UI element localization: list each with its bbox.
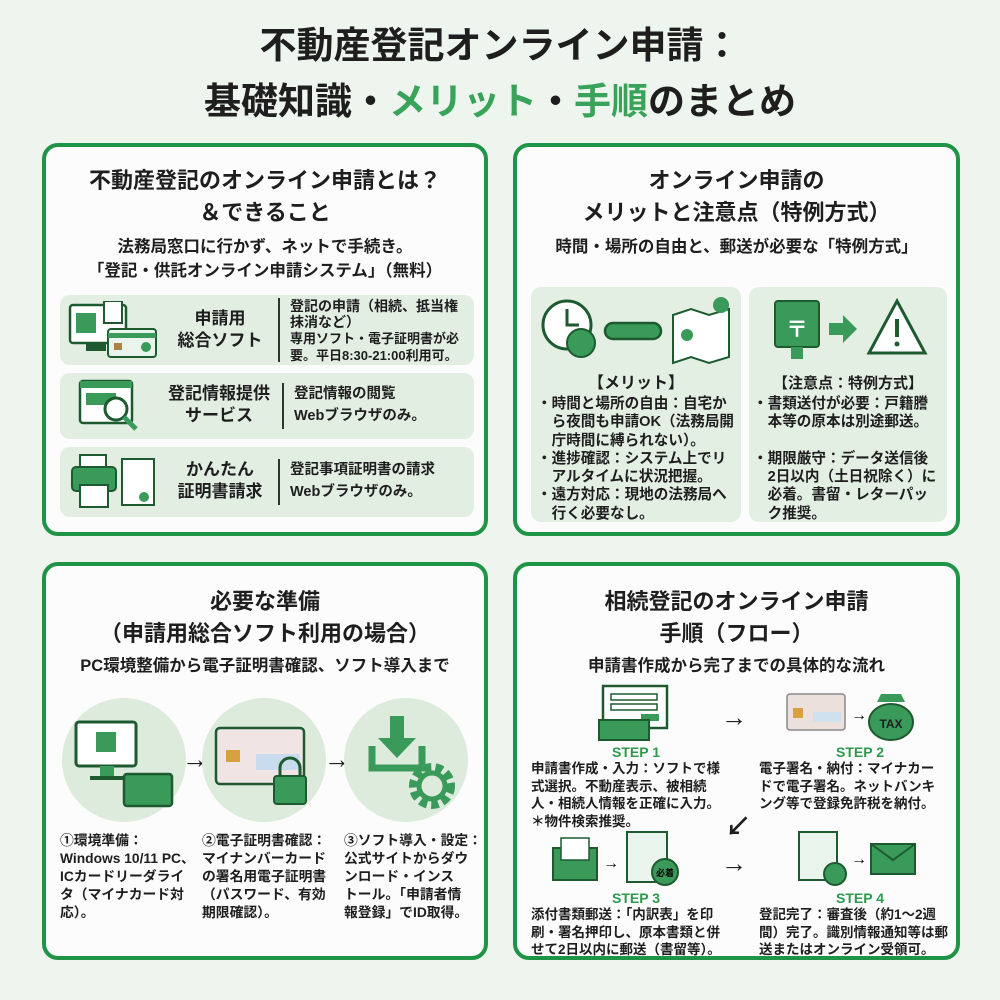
step 2 (759, 693, 935, 811)
box: cautions: 【注意点：特例方式】 (773, 375, 923, 392)
arrow: → (324, 744, 350, 774)
step 1: 人・相続人情報を正確に入力。 (531, 796, 720, 811)
panel: flow: ング等で登録免許税を納付。 (759, 796, 934, 811)
panel: merits (513, 143, 960, 536)
heading: preparation: （申請用総合ソフト利用の場合） (100, 621, 430, 646)
icon: card tax: → (851, 707, 867, 724)
heading: flow: 手順（フロー） (659, 621, 814, 646)
row: info service: 登記情報の閲覧 (294, 386, 396, 402)
heading: basics: ＆できること (199, 200, 331, 225)
title: 基礎知識・メリット・手順のまとめ (204, 81, 796, 122)
row: software: 抹消など） (290, 314, 360, 330)
step 1: environment: タ（マイナカード対 (60, 887, 184, 902)
row: software: 要。平日8:30-21:00利用可。 (290, 348, 458, 363)
box: merits: 【メリット】 (588, 375, 684, 392)
icon: envelope doc: 必着 (656, 867, 674, 878)
step 2: certificate: 期限確認）。 (202, 905, 278, 920)
heading: basics (89, 168, 441, 225)
heading: merits (582, 168, 890, 225)
step 2: certificate: ②電子証明書確認： (202, 833, 326, 848)
step 1: STEP 1 (612, 744, 660, 760)
heading: flow: 相続登記のオンライン申請 (604, 589, 868, 614)
box: cautions (749, 287, 947, 522)
row: software: 登記の申請（相続、抵当権 (290, 298, 458, 314)
box: cautions: ク推奨。 (768, 506, 826, 522)
icon: card lock (202, 698, 326, 822)
arrow: ↙ (725, 812, 751, 842)
step 2: certificate: （パスワード、有効 (202, 887, 326, 902)
step 1: environment: 応）。 (60, 905, 94, 920)
heading: preparation (100, 589, 430, 646)
step 1: environment: ICカードリーダライ (60, 869, 184, 884)
box: merits: ら夜間も申請OK（法務局開 (552, 414, 734, 430)
icon: pc and card (68, 301, 157, 358)
row: software: 申請用 (194, 309, 246, 328)
panel: flow: ＊物件検索推奨。 (531, 814, 639, 828)
step 3: 刷・署名押印し、原本書類と併 (531, 924, 720, 940)
row: info service: 登記情報提供 (168, 384, 270, 403)
subtitle: basics: 「登記・供託オンライン申請システム」（無料） (88, 262, 442, 280)
box: merits: ・進捗確認：システム上でリ (537, 451, 726, 467)
subtitle: basics: 法務局窓口に行かず、ネットで手続き。 (117, 238, 413, 256)
row: certificate: かんたん (186, 460, 254, 479)
step 3: STEP 3 (612, 890, 660, 906)
icon: envelope doc (552, 831, 679, 886)
step 3: software: 公式サイトからダウ (344, 851, 468, 866)
box: cautions: 本等の原本は別途郵送。 (768, 414, 928, 430)
step 1: environment: Windows 10/11 PC、 (60, 851, 195, 866)
step 1 (531, 684, 720, 828)
box: merits: アルタイムに状況把握。 (552, 469, 712, 485)
icon: doc check mail: → (851, 851, 867, 868)
panel: flow (513, 562, 960, 960)
heading: basics: 不動産登記のオンライン申請とは？ (89, 168, 441, 193)
icon: doc check mail (798, 831, 916, 886)
step 4 (759, 831, 948, 957)
box: merits: 行く必要なし。 (552, 506, 654, 522)
icon: post arrow warning (774, 298, 928, 359)
row: software (60, 295, 474, 365)
step 4: 登記完了：審査後（約1〜2週 (759, 907, 936, 922)
step 4: 間）完了。識別情報通知等は郵 (759, 924, 948, 940)
step 3: せて2日以内に郵送（書留等）。 (531, 942, 721, 957)
step 2: certificate (202, 698, 326, 920)
step 2: 電子署名・納付：マイナカー (759, 761, 934, 776)
panel: preparation (42, 562, 488, 960)
subtitle: basics (88, 238, 442, 280)
row: software: 専用ソフト・電子証明書が必 (290, 331, 459, 346)
box: merits: ・遠方対応：現地の法務局へ (537, 487, 727, 503)
step 2: ドで電子署名。ネットバンキ (759, 778, 935, 794)
step 3: software (344, 698, 482, 920)
step 4: STEP 4 (836, 890, 884, 906)
row: certificate (60, 447, 474, 517)
icon: clock bar map (542, 297, 730, 364)
step 1: environment (60, 698, 195, 920)
icon: pc and reader (62, 698, 186, 822)
step 3: software: ンロード・インス (344, 869, 454, 884)
row: certificate: Webブラウザのみ。 (290, 484, 422, 500)
step 2: STEP 2 (836, 744, 884, 760)
step 1: 申請書作成・入力：ソフトで様 (531, 761, 720, 776)
step 3: 添付書類郵送：「内訳表」を印 (531, 907, 713, 922)
box: cautions: 必着。書留・レターパッ (768, 487, 928, 503)
step 3 (531, 831, 721, 957)
heading: merits: メリットと注意点（特例方式） (582, 200, 890, 225)
row: info service (60, 373, 474, 439)
row: certificate: 登記事項証明書の請求 (290, 462, 435, 478)
step 1: environment: ①環境準備： (60, 833, 143, 848)
subtitle: merits: 時間・場所の自由と、郵送が必要な「特例方式」 (555, 238, 918, 256)
step 1: 式選択。不動産表示、被相続 (531, 778, 706, 794)
title: 不動産登記オンライン申請： (260, 25, 740, 66)
box: merits (531, 287, 741, 522)
heading: merits: オンライン申請の (648, 168, 824, 193)
box: cautions: ・書類送付が必要：戸籍謄 (753, 396, 928, 412)
heading: flow (604, 589, 868, 646)
arrow: → (182, 744, 208, 774)
icon: card tax: TAX (879, 717, 903, 731)
icon: form keyboard (598, 684, 668, 741)
row: info service: サービス (185, 406, 253, 425)
heading: preparation: 必要な準備 (210, 589, 320, 614)
icon: post arrow warning: 〒 (786, 317, 808, 342)
arrow: → (721, 848, 747, 878)
row: info service: Webブラウザのみ。 (294, 408, 426, 424)
row: certificate: 証明書請求 (178, 482, 262, 501)
arrow: → (721, 702, 747, 732)
row: software: 総合ソフト (178, 331, 262, 350)
box: merits: 庁時間に縛られない）。 (552, 433, 705, 449)
subtitle: flow: 申請書作成から完了までの具体的な流れ (588, 657, 885, 675)
step 4: 送またはオンライン受領可。 (759, 942, 934, 957)
title (204, 25, 796, 122)
step 2: certificate: マイナンバーカード (202, 851, 326, 866)
box: cautions: 2日以内（土日祝除く）に (768, 469, 936, 485)
step 2: certificate: の署名用電子証明書 (202, 869, 326, 884)
icon: envelope doc: → (603, 855, 619, 872)
icon: browser magnifier (78, 380, 138, 431)
icon: printer and doc (71, 454, 155, 508)
step 3: software: トール。「申請者情 (344, 887, 461, 902)
icon: card tax (786, 693, 914, 741)
step 3: software: 報登録」でID取得。 (344, 905, 468, 920)
step 3: software: ③ソフト導入・設定： (344, 833, 482, 848)
box: merits: ・時間と場所の自由：自宅か (537, 396, 727, 412)
panel: basics (42, 143, 488, 536)
box: cautions: ・期限厳守：データ送信後 (753, 451, 928, 467)
icon: download gear (344, 698, 468, 822)
subtitle: preparation: PC環境整備から電子証明書確認、ソフト導入まで (80, 657, 450, 675)
